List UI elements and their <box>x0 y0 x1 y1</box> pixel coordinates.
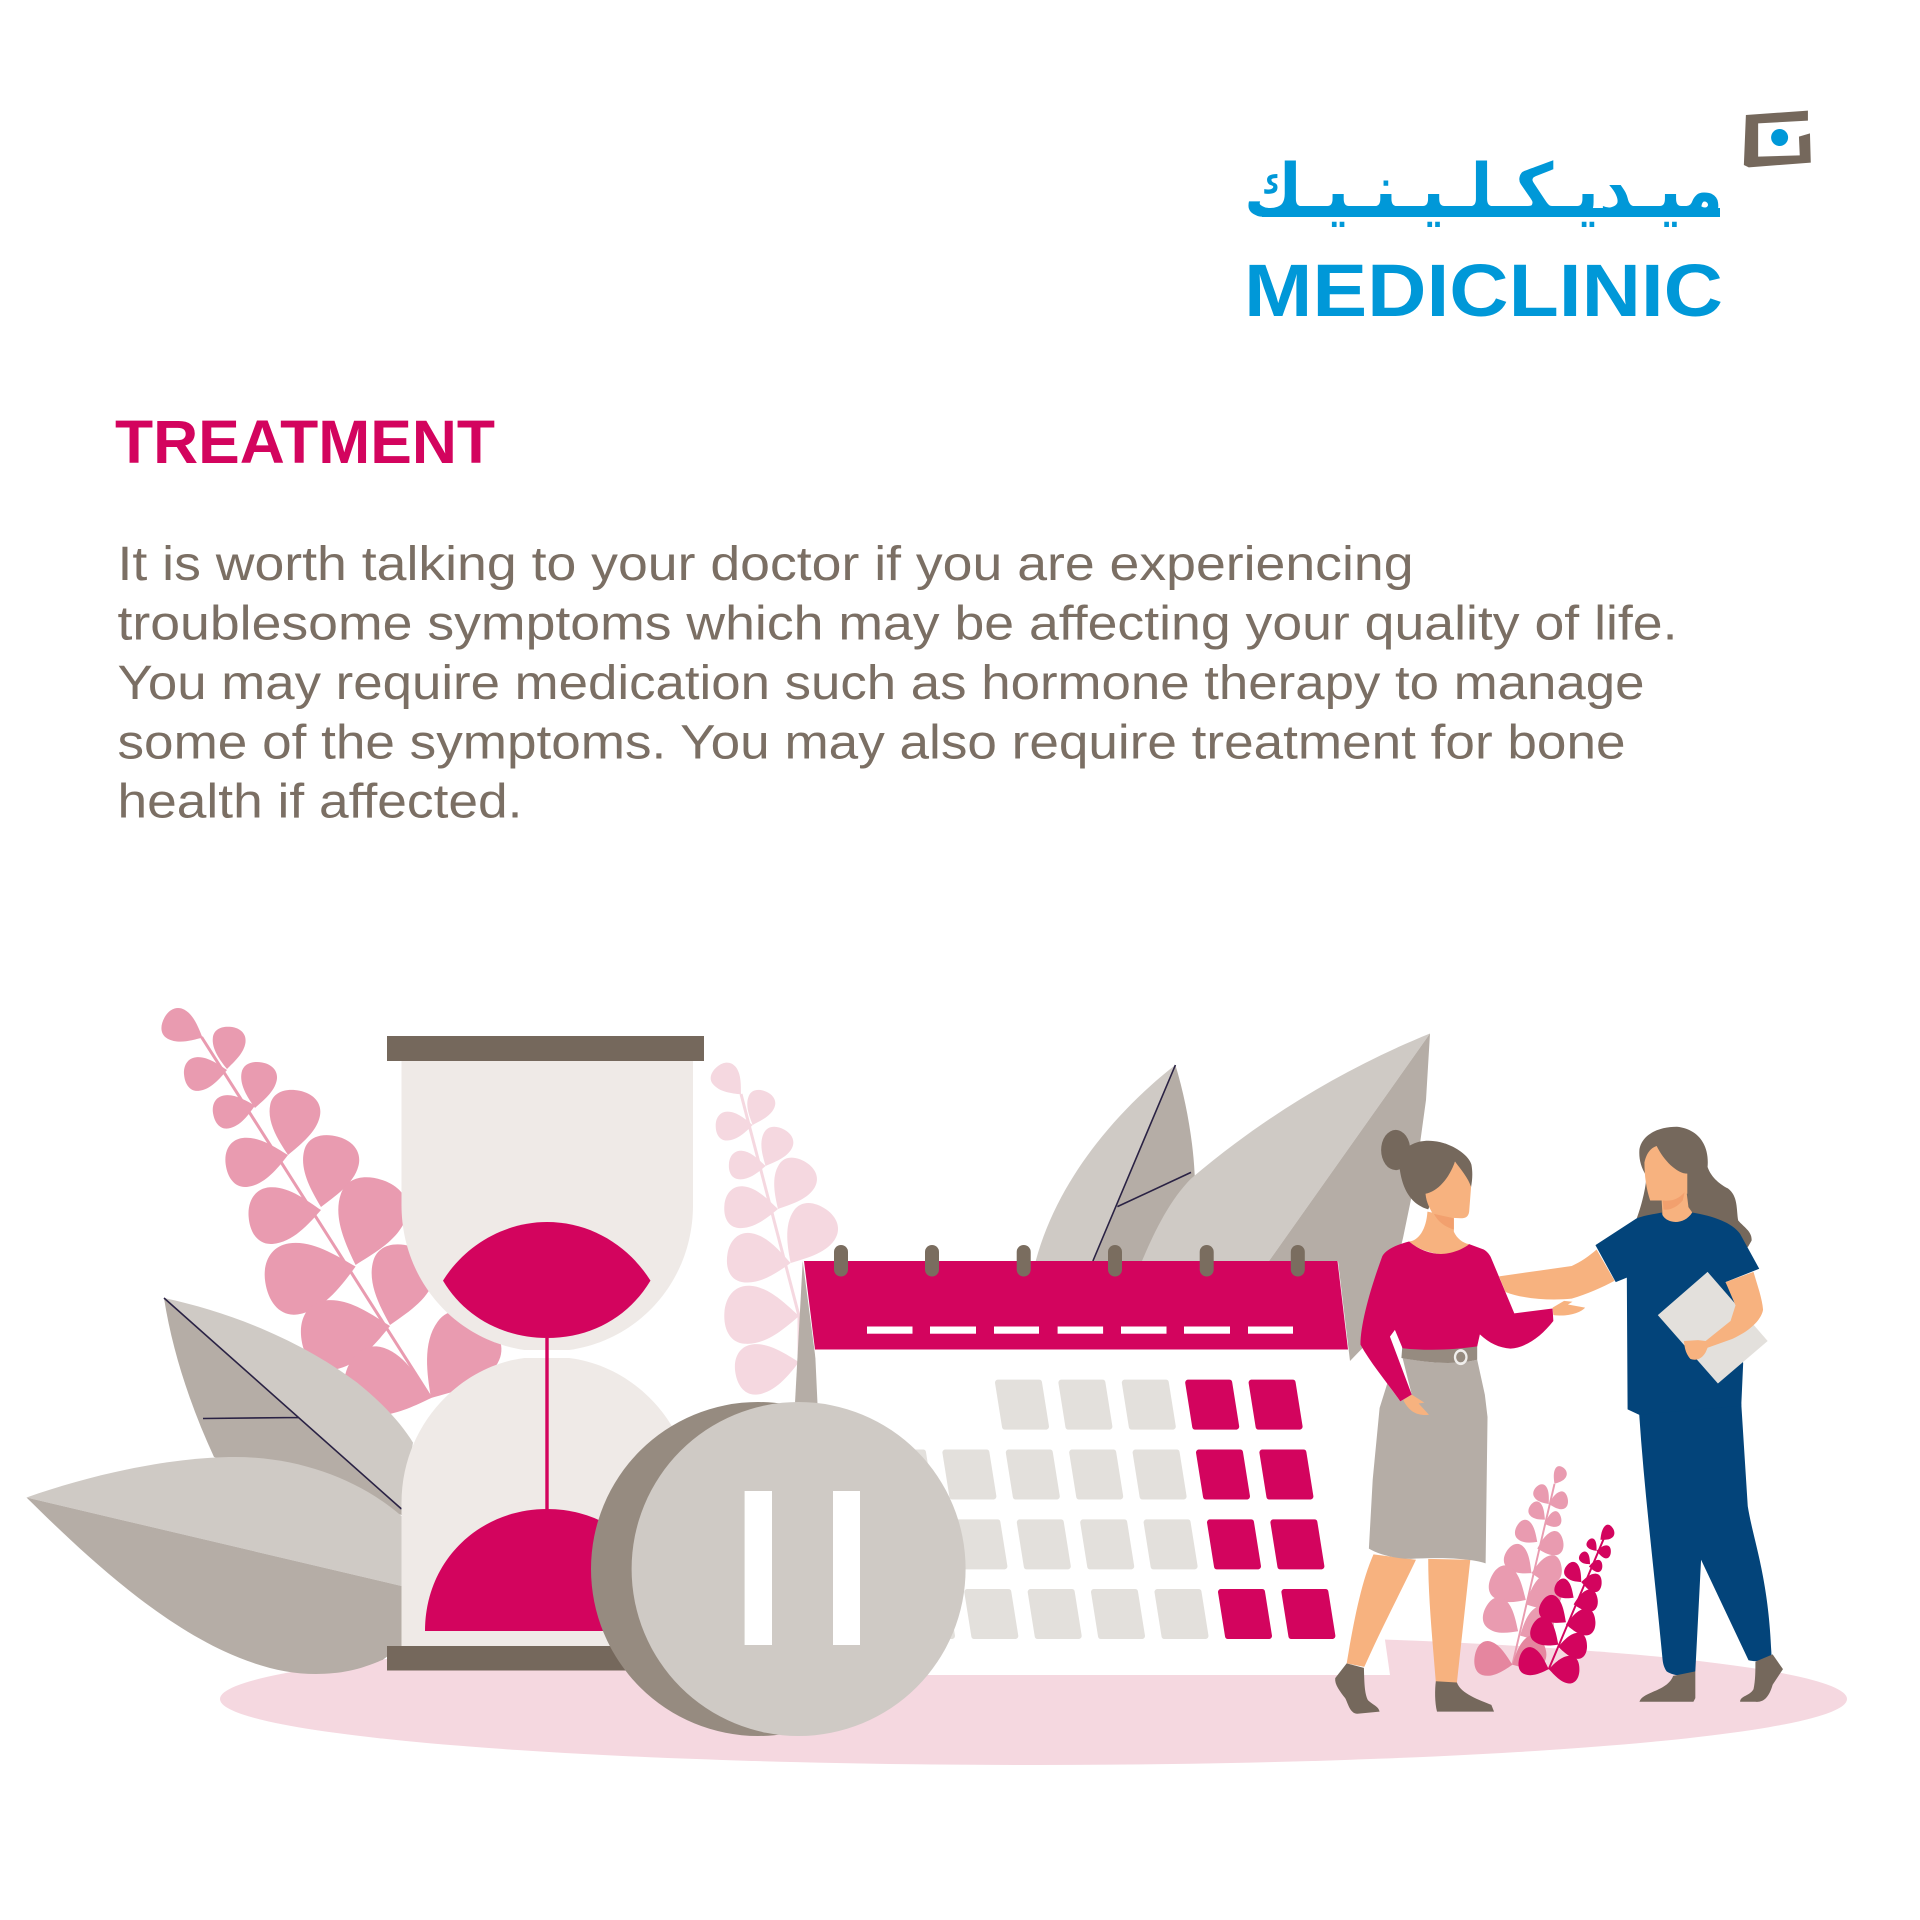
hourglass top sand <box>443 1222 650 1338</box>
body text: health if affected. <box>118 776 522 829</box>
calendar grey day cells <box>882 1383 1206 1636</box>
small leaf behind calendar <box>1036 1065 1200 1261</box>
large leaf behind calendar <box>1142 1034 1430 1361</box>
title: TREATMENT <box>115 408 495 476</box>
hourglass bottom sand <box>425 1509 669 1631</box>
people and small ferns <box>1335 1127 1783 1714</box>
logo: Mediclinic <box>1244 111 1811 332</box>
hourglass stem <box>545 1338 549 1510</box>
body text <box>118 538 1677 829</box>
calendar page <box>815 1350 1390 1675</box>
logo English wordmark: MEDICLINIC <box>1244 249 1723 332</box>
patient figure <box>1335 1130 1585 1714</box>
hourglass top bar <box>387 1036 704 1061</box>
small pink fern <box>1471 1464 1569 1683</box>
small magenta fern <box>1515 1522 1616 1684</box>
doctor figure <box>1499 1127 1783 1702</box>
pale fern behind calendar <box>706 1058 846 1400</box>
body text: You may require medication such as hormone therapy to manage <box>118 657 1644 710</box>
logo icon: brown square with blue dot <box>1744 111 1811 167</box>
pill with pause bars <box>591 1402 966 1736</box>
calendar highlighted day cells <box>1188 1383 1332 1636</box>
logo Arabic wordmark: ميـديـكـلـيـنـيـك <box>1244 148 1723 232</box>
ground ellipse <box>220 1633 1847 1765</box>
calendar header <box>804 1261 1348 1350</box>
calendar weekday dashes <box>867 1326 1293 1334</box>
hourglass glass <box>402 1061 693 1350</box>
pink fern behind hourglass <box>156 1003 513 1433</box>
calendar rings <box>834 1245 1305 1276</box>
hourglass <box>387 1036 704 1670</box>
calendar back spike <box>795 1261 821 1403</box>
hourglass bottom bar <box>387 1646 704 1670</box>
body text: troublesome symptoms which may be affecting your quality of life. <box>118 598 1677 650</box>
calendar <box>795 1245 1390 1675</box>
back leaf left <box>164 1298 413 1515</box>
front leaf left <box>26 1457 402 1674</box>
body text: some of the symptoms. You may also require treatment for bone <box>118 716 1626 769</box>
body text: It is worth talking to your doctor if you are experiencing <box>118 538 1414 591</box>
